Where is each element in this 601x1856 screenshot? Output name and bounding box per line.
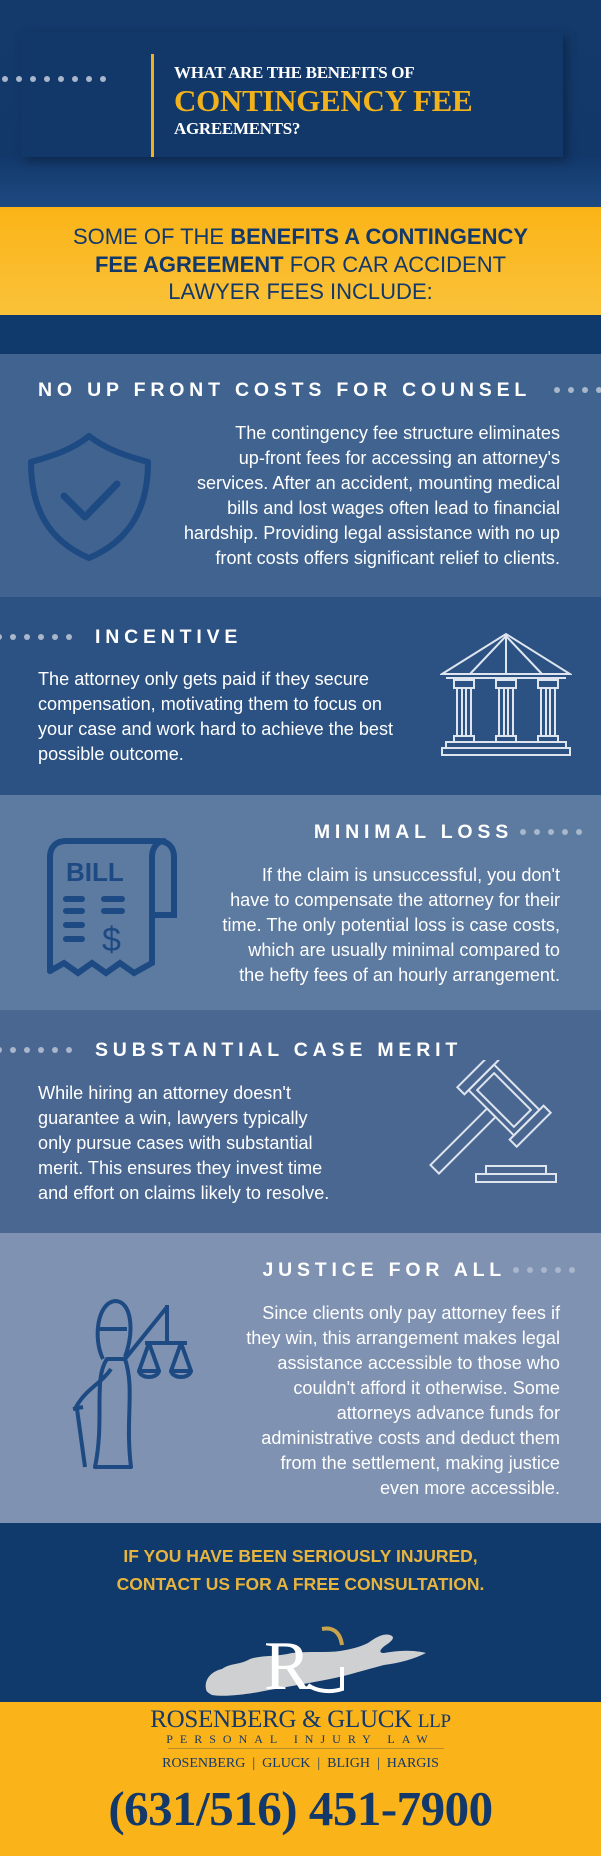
heading: MINIMAL LOSS: [314, 821, 513, 843]
title box: [21, 32, 563, 157]
yellow intro band: SOME OF THE BENEFITS A CONTINGENCY: [73, 224, 528, 249]
body text: only pursue cases with substantial: [38, 1133, 313, 1153]
body text: which are usually minimal compared to: [248, 940, 560, 960]
dots: [513, 1267, 575, 1273]
dots: [520, 829, 582, 835]
body text: guarantee a win, lawyers typically: [38, 1108, 308, 1128]
body text: The contingency fee structure eliminates: [235, 423, 560, 443]
heading: NO UP FRONT COSTS FOR COUNSEL: [38, 379, 531, 401]
dots: [0, 1047, 72, 1053]
icon: shield: [28, 433, 151, 561]
body text: they win, this arrangement makes legal: [246, 1328, 560, 1348]
body text: merit. This ensures they invest time: [38, 1158, 322, 1178]
dots: [0, 634, 72, 640]
body text: bills and lost wages often lead to financial: [227, 498, 560, 518]
title text: AGREEMENTS?: [174, 119, 300, 138]
panel: incentive: [0, 597, 601, 795]
body text: time. The only potential loss is case costs,: [222, 915, 560, 935]
heading: INCENTIVE: [95, 626, 242, 648]
yellow intro band: LAWYER FEES INCLUDE:: [168, 279, 433, 304]
body text: [222, 865, 560, 985]
body text: administrative costs and deduct them: [261, 1428, 560, 1448]
icon: bill: $: [102, 921, 121, 959]
partners: ROSENBERG | GLUCK | BLIGH | HARGIS: [162, 1756, 439, 1771]
panel: minimal loss: [0, 795, 601, 1010]
body text: up-front fees for accessing an attorney's: [239, 448, 560, 468]
body text: [38, 669, 393, 764]
body text: possible outcome.: [38, 744, 184, 764]
body text: the hefty fees of an hourly arrangement.: [239, 965, 560, 985]
body text: attorneys advance funds for: [337, 1403, 560, 1423]
decorative dots: [2, 76, 106, 82]
yellow intro band: [0, 207, 601, 315]
accent line: [151, 54, 154, 157]
heading: SUBSTANTIAL CASE MERIT: [95, 1039, 462, 1061]
panel: justice for all: [0, 1233, 601, 1523]
title text: WHAT ARE THE BENEFITS OF: [174, 63, 414, 82]
icon: gavel: [429, 1060, 557, 1183]
icon: courthouse: [440, 632, 572, 756]
body text: compensation, motivating them to focus on: [38, 694, 382, 714]
body text: If the claim is unsuccessful, you don't: [262, 865, 560, 885]
body text: couldn't afford it otherwise. Some: [293, 1378, 560, 1398]
body text: and effort on claims likely to resolve.: [38, 1183, 329, 1203]
body text: [38, 1083, 329, 1203]
body text: hardship. Providing legal assistance with no up: [184, 523, 560, 543]
body text: front costs offers significant relief to clients.: [215, 548, 560, 568]
body text: your case and work hard to achieve the best: [38, 719, 393, 739]
panel: substantial case merit: [0, 1010, 601, 1233]
cta text: CONTACT US FOR A FREE CONSULTATION.: [117, 1574, 484, 1594]
yellow intro band: FEE AGREEMENT FOR CAR ACCIDENT: [95, 252, 506, 276]
phone: (631/516) 451-7900: [108, 1781, 493, 1836]
body text: from the settlement, making justice: [280, 1453, 560, 1473]
icon: bill: BILL: [66, 857, 124, 887]
footer: call to action: [0, 1523, 601, 1702]
body text: The attorney only gets paid if they secure: [38, 669, 369, 689]
logo: [206, 1626, 426, 1702]
body text: [246, 1303, 560, 1498]
body text: even more accessible.: [380, 1478, 560, 1498]
cta text: IF YOU HAVE BEEN SERIOUSLY INJURED,: [123, 1546, 478, 1566]
firm name: ROSENBERG & GLUCK LLP: [150, 1706, 451, 1733]
body text: While hiring an attorney doesn't: [38, 1083, 291, 1103]
panel: no up front costs: [0, 354, 601, 597]
tagline: PERSONAL INJURY LAW: [166, 1732, 435, 1746]
dots: [554, 387, 601, 393]
title text: [174, 63, 472, 138]
body text: assistance accessible to those who: [277, 1353, 560, 1373]
title text: CONTINGENCY FEE: [174, 83, 472, 118]
header background: [0, 0, 601, 207]
body text: services. After an accident, mounting medical: [197, 473, 560, 493]
body text: [184, 423, 560, 568]
cta text: [117, 1546, 484, 1594]
heading: JUSTICE FOR ALL: [262, 1259, 506, 1281]
body text: Since clients only pay attorney fees if: [262, 1303, 560, 1323]
footer: firm info: [0, 1702, 601, 1856]
icon: lady justice: [72, 1299, 193, 1469]
body text: have to compensate the attorney for their: [230, 890, 560, 910]
icon: bill: [47, 838, 177, 976]
